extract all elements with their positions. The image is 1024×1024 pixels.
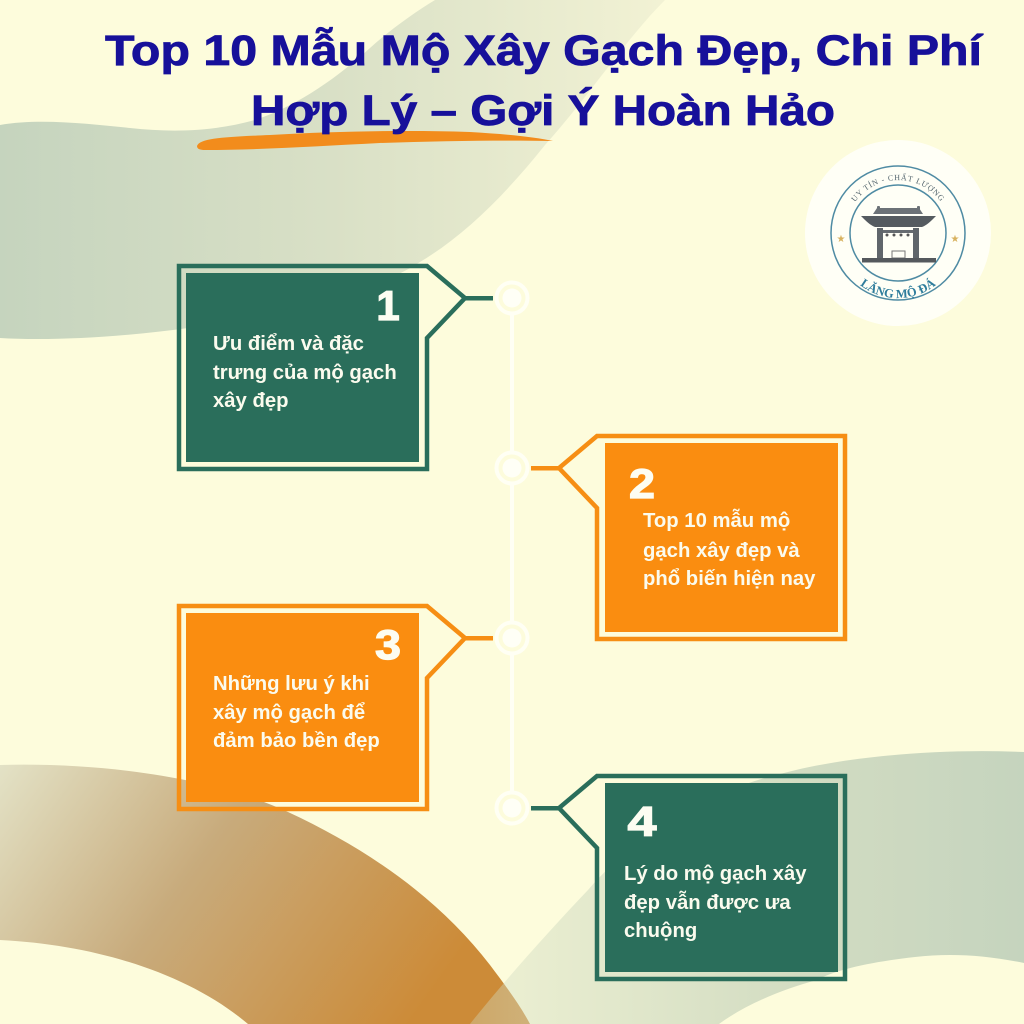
background shape: bottom right wave <box>470 751 1024 1024</box>
card 3 text: Những lưu ý khi <box>213 673 370 695</box>
logo badge <box>805 140 991 326</box>
number 3: 3 <box>375 621 401 668</box>
title: Hợp Lý – Gợi Ý Hoàn Hảo <box>251 87 835 135</box>
card 4 text: đẹp vẫn được ưa <box>624 890 791 914</box>
title <box>105 26 984 135</box>
timeline spine <box>510 298 514 808</box>
title: Top 10 Mẫu Mộ Xây Gạch Đẹp, Chi Phí <box>105 26 984 75</box>
timeline nodes <box>496 282 528 824</box>
number 2: 2 <box>629 460 655 507</box>
card 3 text: đảm bảo bền đẹp <box>213 730 380 752</box>
card 2 text: phổ biến hiện nay <box>643 568 816 590</box>
panel: card 2 <box>531 436 845 639</box>
panel: card 4 <box>531 776 845 979</box>
background shape: top left wave <box>0 0 665 339</box>
number 1: 1 <box>376 282 400 329</box>
card 2 text: gạch xây đẹp và <box>643 540 800 562</box>
orange brush underline <box>197 131 553 150</box>
icon: pavilion <box>861 206 936 262</box>
card 1 text: trưng của mộ gạch <box>213 362 397 384</box>
number 4: 4 <box>628 798 657 845</box>
logo top text: UY TÍN - CHẤT LƯỢNG <box>851 173 944 201</box>
card 1 text: xây đẹp <box>213 390 289 412</box>
logo bottom text: LĂNG MỘ ĐÁ <box>860 278 936 299</box>
background shape: bottom left arc <box>0 765 530 1024</box>
card 2 text: Top 10 mẫu mộ <box>643 508 790 532</box>
panel: card 3 <box>179 606 493 809</box>
card 1 text: Ưu điểm và đặc <box>213 333 364 355</box>
icon: star left: ★ <box>837 234 846 245</box>
card 4 text: Lý do mộ gạch xây <box>624 863 807 885</box>
card 4 text: chuộng <box>624 920 697 942</box>
panel: card 1 <box>179 266 493 469</box>
card 3 text: xây mộ gạch để <box>213 702 365 724</box>
icon: star right: ★ <box>951 234 960 245</box>
